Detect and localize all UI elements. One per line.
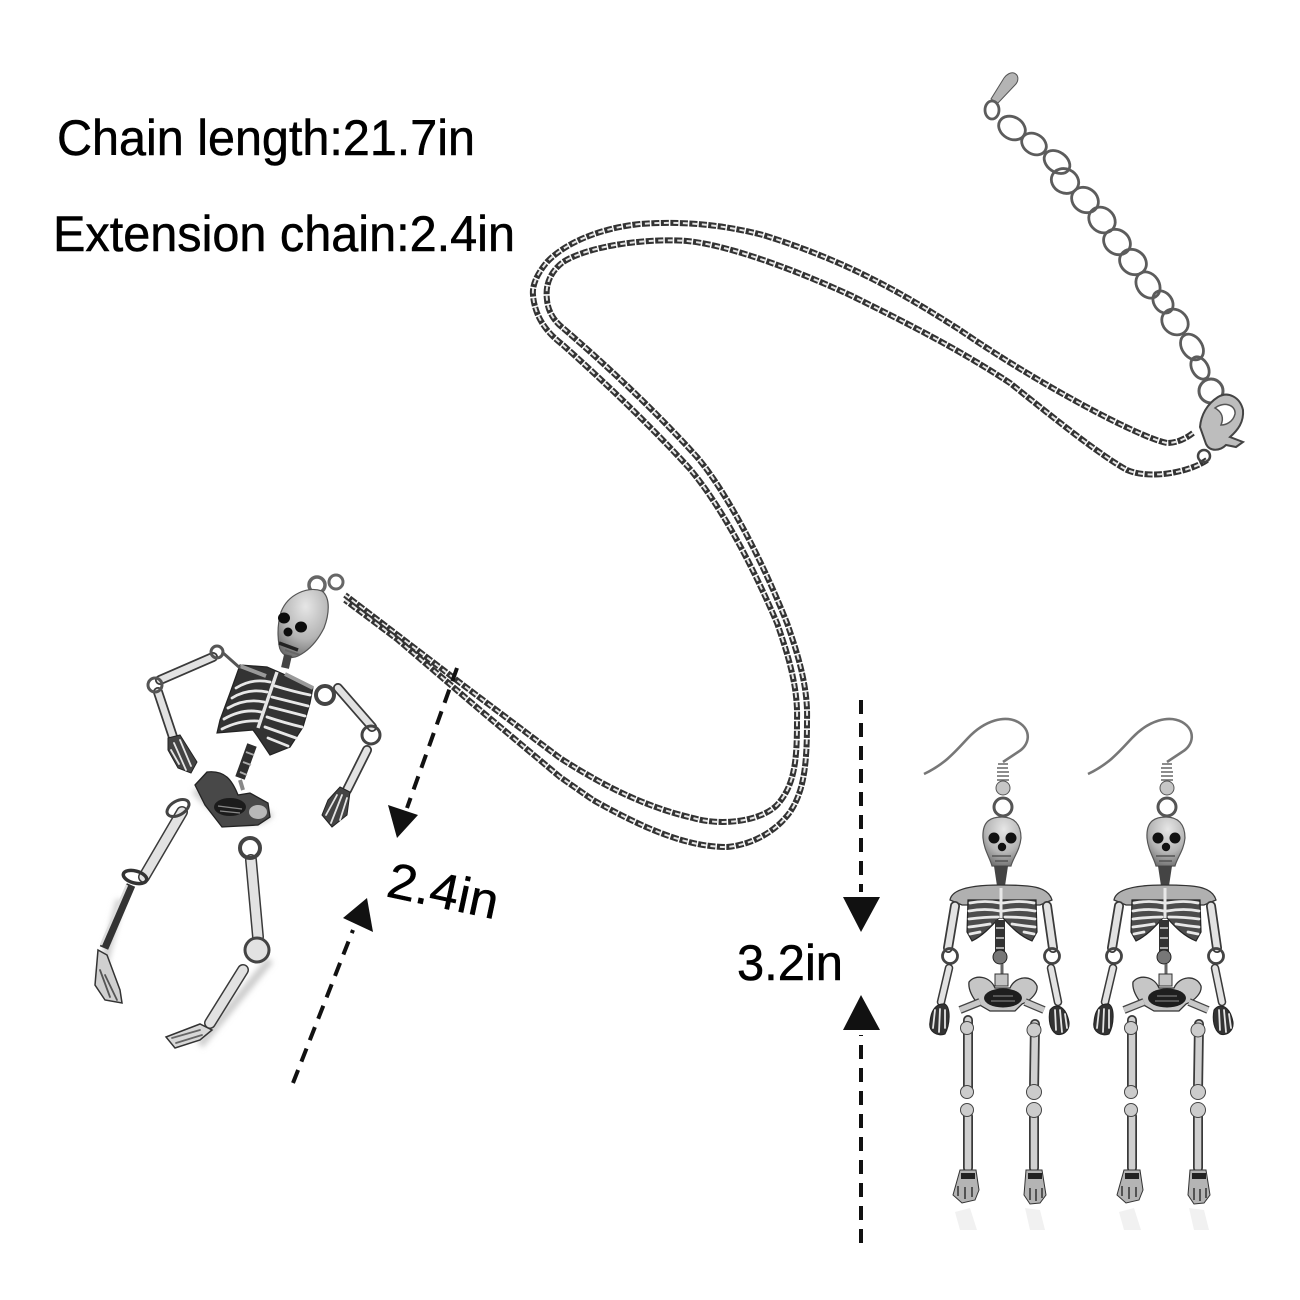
- pendant spine: [240, 745, 254, 778]
- extension chain: [985, 73, 1213, 382]
- label: pendant size: 2.4in: [383, 852, 504, 930]
- arrow: earring upper: [843, 700, 880, 932]
- pendant skeleton: [95, 575, 380, 1048]
- label: earring size: 3.2in: [737, 935, 843, 991]
- title: chain length: Chain length:21.7in: [57, 110, 475, 166]
- title: extension chain: Extension chain:2.4in: [53, 206, 515, 262]
- necklace chain: first strand: [345, 223, 1193, 822]
- arrow: pendant upper: [388, 668, 457, 838]
- necklace chain: second strand: [345, 240, 1207, 847]
- pendant arms: [148, 646, 380, 827]
- lobster clasp: [1198, 379, 1243, 462]
- pendant skull: [278, 590, 328, 668]
- earring right: [1088, 719, 1233, 1230]
- pendant ribcage: [217, 665, 313, 755]
- pendant pelvis: [195, 772, 270, 827]
- arrow: pendant lower: [293, 898, 373, 1083]
- arrow: earring lower: [843, 995, 880, 1243]
- pendant legs: [95, 796, 269, 1048]
- pendant rings: [309, 575, 343, 593]
- earring left: [924, 719, 1069, 1230]
